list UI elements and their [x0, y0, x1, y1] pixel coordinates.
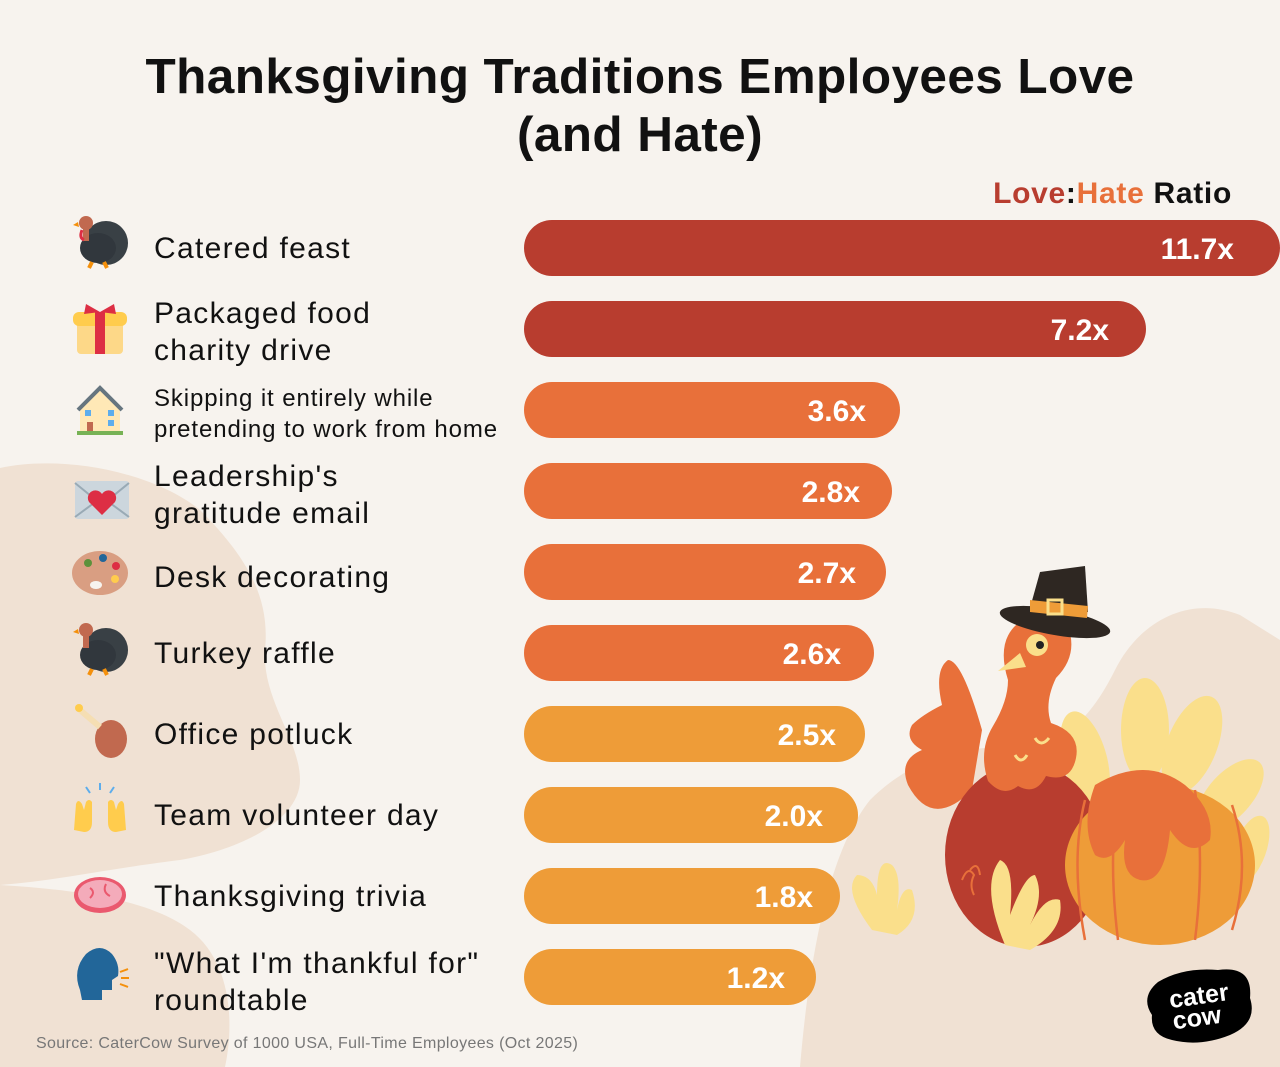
- bar chart: 2.5x: [778, 719, 836, 752]
- legend: Love:Hate Ratio: [993, 177, 1232, 210]
- icon: raised hands: [74, 783, 126, 832]
- labels: Office potluck: [154, 718, 353, 751]
- labels: Thanksgiving trivia: [154, 880, 427, 913]
- source: Source: CaterCow Survey of 1000 USA, Full-Time Employees (Oct 2025): [36, 1035, 578, 1052]
- title: (and Hate): [517, 107, 763, 162]
- icon: gift: [73, 304, 127, 354]
- labels: Catered feast: [154, 232, 351, 265]
- logo: cater cow: cow: [1171, 1001, 1223, 1035]
- bar chart: 1.2x: [727, 962, 785, 995]
- icon: palette: [72, 551, 128, 595]
- labels: roundtable: [154, 984, 309, 1017]
- logo: cater cow: [1147, 969, 1252, 1043]
- logo: cater cow: cater: [1167, 978, 1231, 1014]
- bar chart: 1.8x: [755, 881, 813, 914]
- icon: turkey 2: [73, 623, 128, 675]
- labels: [154, 232, 498, 1017]
- icon: house: [77, 388, 123, 435]
- labels: Leadership's: [154, 460, 339, 493]
- bar chart: [524, 220, 1280, 1005]
- bar chart: 11.7x: [1161, 233, 1234, 266]
- bar chart: 2.6x: [783, 638, 841, 671]
- title: [146, 49, 1134, 162]
- labels: Desk decorating: [154, 561, 390, 594]
- illustration: pilgrim turkey with pumpkin: [852, 566, 1277, 950]
- bar chart: 3.6x: [808, 395, 866, 428]
- background blobs: [0, 463, 1280, 1067]
- bar chart: 2.7x: [798, 557, 856, 590]
- bar chart: 2.0x: [765, 800, 823, 833]
- labels: Skipping it entirely while: [154, 385, 434, 412]
- labels: pretending to work from home: [154, 416, 498, 443]
- labels: "What I'm thankful for": [154, 947, 479, 980]
- icon: love letter: [75, 481, 129, 519]
- labels: Packaged food: [154, 297, 371, 330]
- icon: brain: [74, 877, 126, 913]
- icon: speaking head: [77, 948, 129, 1000]
- labels: Team volunteer day: [154, 799, 439, 832]
- labels: Turkey raffle: [154, 637, 336, 670]
- labels: charity drive: [154, 334, 333, 367]
- labels: gratitude email: [154, 497, 370, 530]
- bar chart: 7.2x: [1051, 314, 1109, 347]
- icon: drumstick: [75, 704, 127, 758]
- title: Thanksgiving Traditions Employees Love: [146, 49, 1134, 104]
- icon: turkey: [73, 216, 128, 268]
- bar chart: 2.8x: [802, 476, 860, 509]
